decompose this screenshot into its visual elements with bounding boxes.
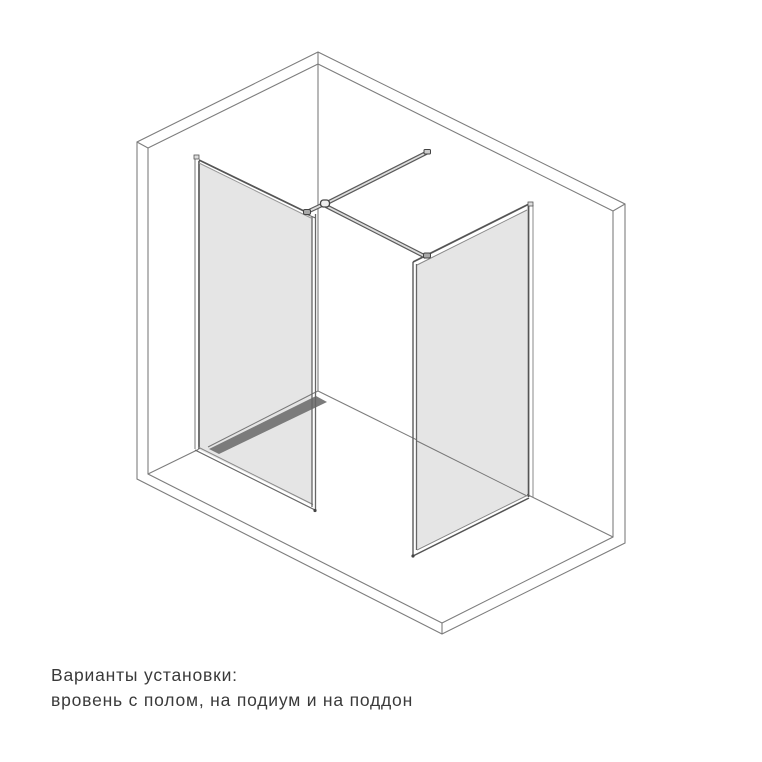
caption: вровень с полом, на подиум и на поддон [51,690,413,710]
right panel frame [411,202,533,558]
caption: Варианты установки: [51,665,238,685]
illustration: shower room [137,52,625,634]
floor line behind left glass [208,394,312,447]
right glass panel [411,202,533,558]
central connector [320,200,330,207]
drain channel [209,396,327,454]
floor line behind right glass [417,441,527,496]
support rods and connectors [304,150,430,258]
rod to left panel [307,204,324,212]
right glass [417,210,527,549]
rod to right panel [326,206,426,257]
room walls [137,52,625,634]
left glass [198,162,312,505]
right connector [424,253,430,258]
left glass panel [194,155,327,512]
rod to back wall [325,152,428,204]
wall mount [424,150,430,154]
left panel frame [194,155,317,512]
caption [51,665,413,710]
left connector [304,210,310,214]
